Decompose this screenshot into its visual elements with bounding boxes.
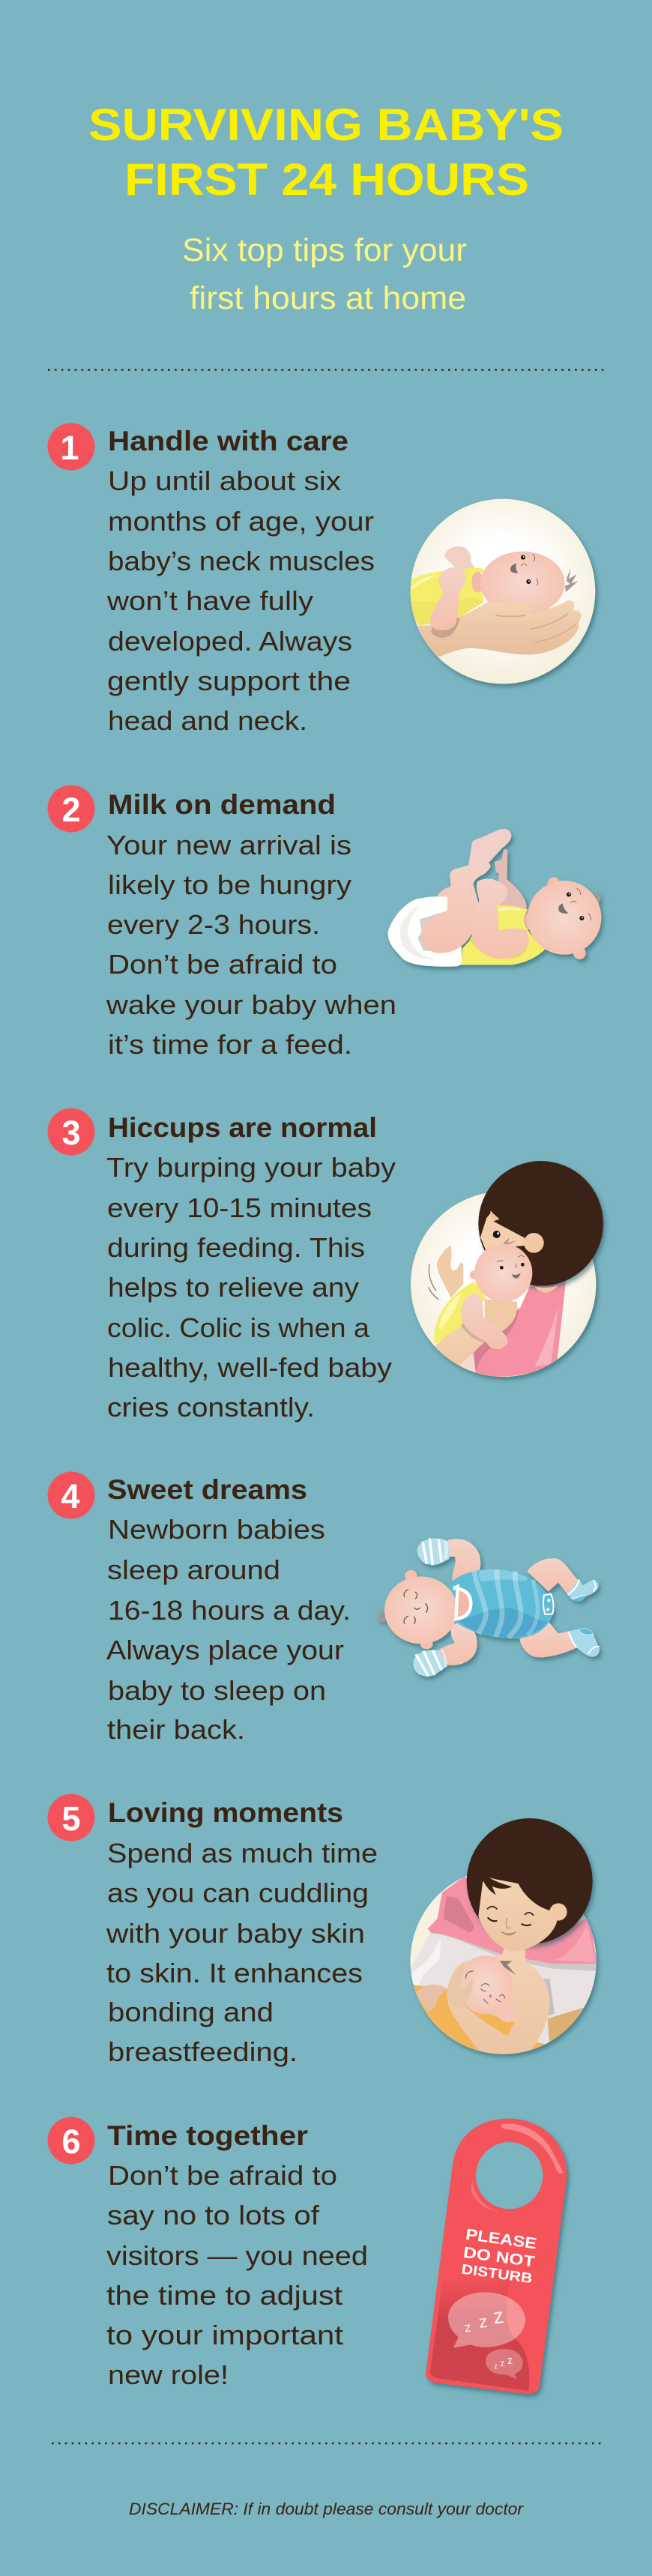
number badge 4 bbox=[48, 1472, 94, 1518]
heading: loving moments: Loving moments bbox=[108, 1797, 343, 1828]
body text: hiccups are normal: during feeding. This bbox=[107, 1232, 365, 1263]
body text: loving moments: breastfeeding. bbox=[108, 2036, 298, 2067]
body text: hiccups are normal: cries constantly. bbox=[107, 1392, 315, 1423]
body text: sweet dreams: their back. bbox=[107, 1714, 245, 1745]
body text: handle with care: Up until about six bbox=[108, 465, 341, 496]
body text: milk on demand: Your new arrival is bbox=[106, 830, 351, 860]
number badge 1: 1 bbox=[60, 429, 79, 467]
panel: tip 1 handle with care bbox=[48, 423, 595, 736]
number badge 5 bbox=[48, 1794, 94, 1841]
body text: hiccups are normal: every 10-15 minutes bbox=[107, 1192, 372, 1223]
body text: time together: visitors — you need bbox=[106, 2240, 368, 2271]
sleeping zzz: z bbox=[493, 2362, 498, 2371]
body text: time together bbox=[106, 2160, 368, 2390]
body text: hiccups are normal: Try burping your baby bbox=[106, 1152, 396, 1183]
icon: baby held in a hand bbox=[408, 499, 595, 684]
door hanger lettering: DISTURB bbox=[460, 2260, 534, 2286]
body text: milk on demand bbox=[106, 830, 396, 1060]
heading: hiccups are normal: Hiccups are normal bbox=[108, 1112, 377, 1143]
sleeping zzz: z bbox=[507, 2354, 513, 2367]
sleeping zzz bbox=[463, 2304, 513, 2371]
number badge 5: 5 bbox=[61, 1800, 81, 1838]
sleeping zzz: z bbox=[463, 2320, 472, 2335]
body text: loving moments bbox=[106, 1838, 378, 2067]
body text: hiccups are normal: colic. Colic is when a bbox=[107, 1312, 370, 1343]
door hanger lettering bbox=[460, 2226, 538, 2286]
disclaimer: DISCLAIMER: If in doubt please consult your doctor bbox=[129, 2500, 525, 2518]
body text: sweet dreams: Always place your bbox=[106, 1635, 344, 1665]
body text: milk on demand: likely to be hungry bbox=[108, 869, 351, 900]
body text: milk on demand: wake your baby when bbox=[106, 989, 396, 1020]
number badge 1 bbox=[48, 423, 94, 471]
body text: handle with care: months of age, your bbox=[108, 506, 374, 537]
title: FIRST 24 HOURS bbox=[124, 154, 529, 205]
body text: hiccups are normal: helps to relieve any bbox=[108, 1272, 359, 1303]
body text: loving moments: as you can cuddling bbox=[107, 1877, 369, 1908]
number badge 6 bbox=[48, 2117, 94, 2165]
body text: loving moments: Spend as much time bbox=[107, 1838, 378, 1868]
body text: handle with care: won’t have fully bbox=[106, 585, 313, 616]
body text: time together: the time to adjust bbox=[106, 2280, 342, 2311]
number badge 6: 6 bbox=[61, 2123, 81, 2161]
body text: sweet dreams: Newborn babies bbox=[108, 1514, 325, 1545]
body text: handle with care bbox=[106, 465, 375, 736]
number badge 4: 4 bbox=[61, 1477, 80, 1515]
number badge 3 bbox=[48, 1108, 94, 1156]
body text: time together: to your important bbox=[106, 2320, 343, 2350]
heading: sweet dreams: Sweet dreams bbox=[107, 1474, 307, 1505]
panel: tip 4 sweet dreams bbox=[48, 1472, 600, 1745]
body text: time together: new role! bbox=[108, 2359, 229, 2390]
heading: handle with care: Handle with care bbox=[108, 426, 348, 456]
body text: sweet dreams bbox=[106, 1514, 351, 1745]
body text: milk on demand: it’s time for a feed. bbox=[108, 1029, 352, 1060]
body text: time together: Don’t be afraid to bbox=[108, 2160, 337, 2191]
door hanger lettering: PLEASE bbox=[465, 2226, 538, 2253]
body text: hiccups are normal: healthy, well-fed baby bbox=[108, 1352, 392, 1383]
subtitle: first hours at home bbox=[190, 280, 466, 316]
body text: milk on demand: every 2-3 hours. bbox=[107, 909, 320, 940]
body text: sweet dreams: 16-18 hours a day. bbox=[108, 1595, 351, 1626]
subtitle bbox=[182, 232, 467, 316]
body text: handle with care: gently support the bbox=[107, 666, 351, 696]
body text: loving moments: to skin. It enhances bbox=[106, 1958, 363, 1988]
body text: loving moments: with your baby skin bbox=[106, 1918, 365, 1949]
door hanger lettering: DO NOT bbox=[462, 2244, 536, 2271]
body text: sweet dreams: baby to sleep on bbox=[108, 1675, 326, 1706]
icon: mother burping baby bbox=[411, 1161, 603, 1377]
panel: tip 6 time together bbox=[48, 2117, 567, 2394]
icon: mother cuddling baby skin to skin bbox=[407, 1818, 597, 2059]
heading: milk on demand: Milk on demand bbox=[108, 789, 336, 820]
icon: baby lying with legs raised bbox=[388, 829, 603, 967]
number badge 3: 3 bbox=[61, 1114, 81, 1152]
panel: tip 5 loving moments bbox=[48, 1794, 597, 2067]
body text: time together: say no to lots of bbox=[107, 2200, 320, 2230]
sleeping zzz: z bbox=[499, 2358, 505, 2368]
body text: handle with care: developed. Always bbox=[108, 626, 352, 657]
icon: baby sleeping on back in blue onesie bbox=[375, 1538, 600, 1677]
title bbox=[88, 100, 564, 205]
sleeping zzz: z bbox=[477, 2311, 489, 2332]
panel: tip 3 hiccups are normal bbox=[48, 1108, 603, 1423]
heading: time together: Time together bbox=[107, 2120, 308, 2151]
title: SURVIVING BABY'S bbox=[88, 100, 564, 150]
body text: handle with care: head and neck. bbox=[108, 705, 307, 736]
icon: do not disturb door hanger bbox=[426, 2119, 567, 2394]
body text: sweet dreams: sleep around bbox=[107, 1554, 280, 1585]
subtitle: Six top tips for your bbox=[182, 232, 467, 268]
body text: milk on demand: Don’t be afraid to bbox=[108, 949, 337, 980]
body text: loving moments: bonding and bbox=[108, 1997, 274, 2027]
body text: hiccups are normal bbox=[106, 1152, 396, 1423]
panel: tip 2 milk on demand bbox=[48, 785, 603, 1060]
number badge 2: 2 bbox=[61, 791, 81, 829]
number badge 2 bbox=[48, 785, 94, 832]
sleeping zzz: z bbox=[492, 2304, 505, 2329]
body text: handle with care: baby’s neck muscles bbox=[108, 546, 375, 576]
